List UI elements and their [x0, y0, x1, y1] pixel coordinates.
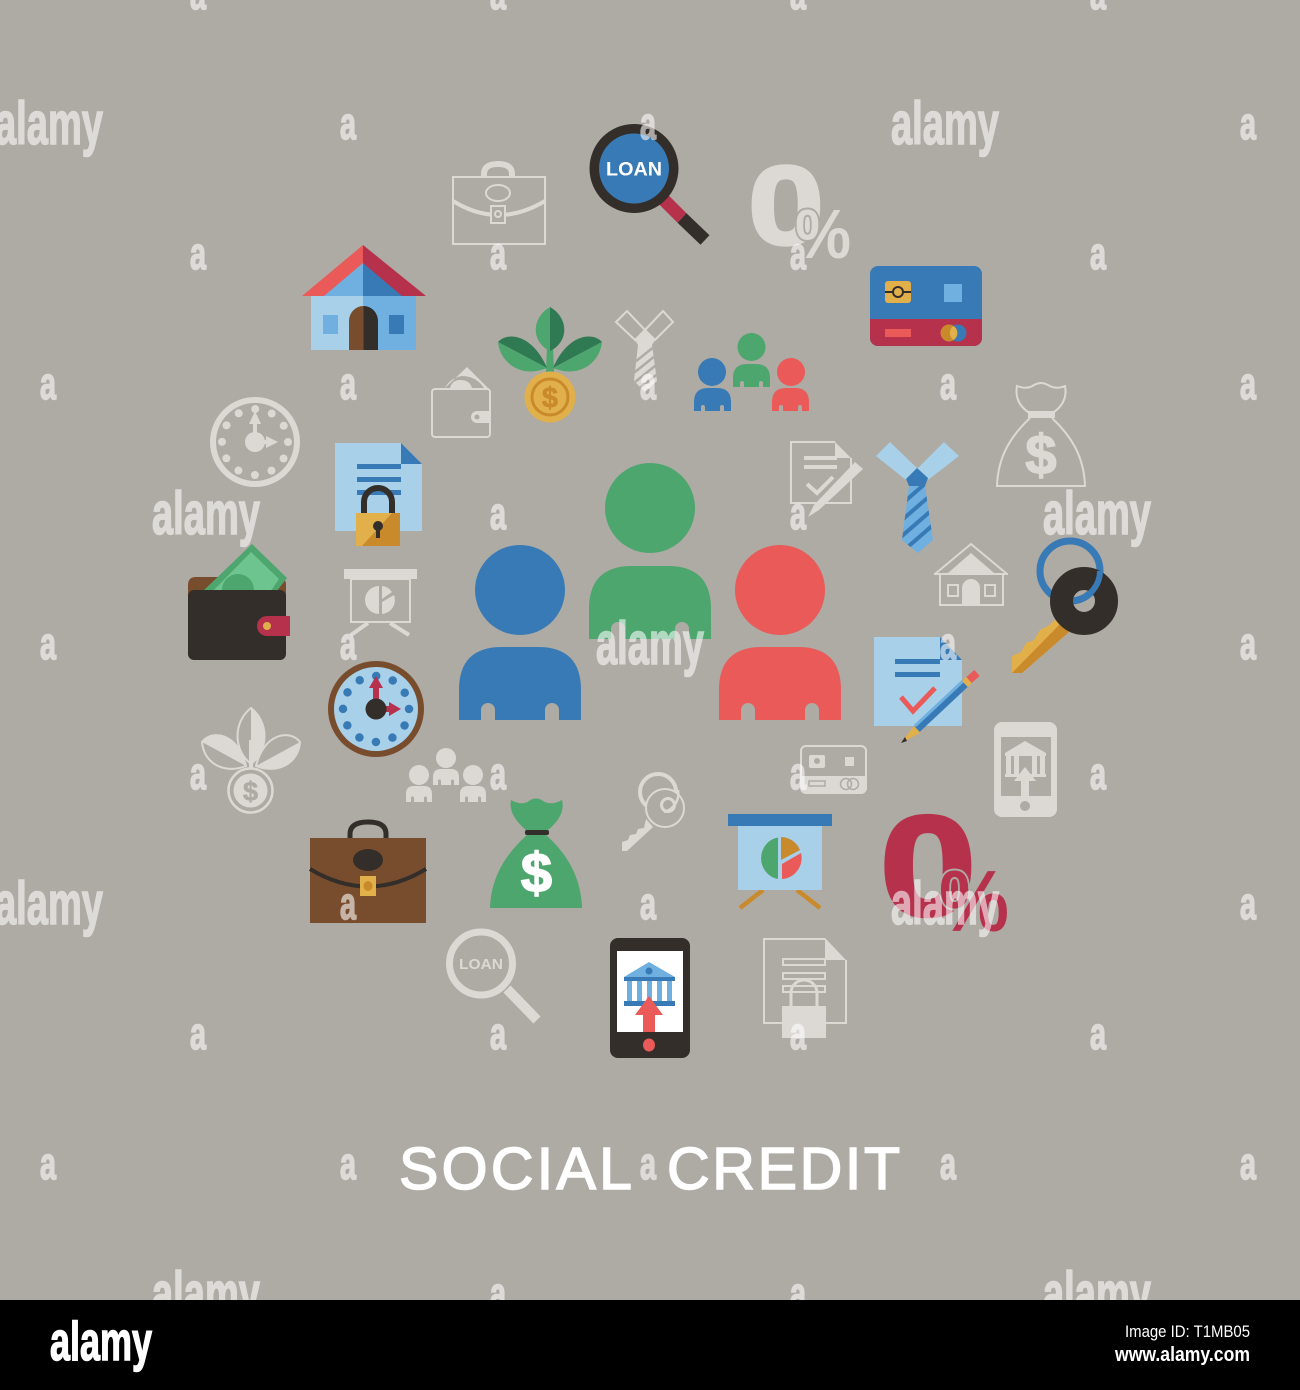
icon: key with ring: [1012, 541, 1106, 673]
watermark pattern: a: [1240, 358, 1257, 409]
watermark pattern: a: [940, 618, 957, 669]
watermark pattern: alamy: [891, 870, 999, 937]
title: SOCIAL: [399, 1136, 632, 1202]
watermark pattern: a: [40, 618, 57, 669]
watermark pattern: a: [1240, 878, 1257, 929]
icon: house: [302, 245, 426, 350]
watermark pattern: a: [940, 1138, 957, 1189]
icon: outline money bag: [997, 383, 1085, 486]
icon: plant with coin: $: [542, 382, 558, 414]
icon: outline presentation board: [344, 569, 417, 635]
central group: three people: [459, 463, 841, 720]
watermark pattern: a: [1090, 1008, 1107, 1059]
watermark pattern: a: [190, 1008, 207, 1059]
footer logo: alamy: [50, 1310, 152, 1372]
icon: crimson zero percent: %: [939, 854, 1009, 950]
icon: money bag: [490, 798, 582, 908]
watermark pattern: alamy: [1043, 1260, 1151, 1327]
icon: presentation board: [728, 814, 832, 908]
watermark pattern: a: [490, 1008, 507, 1059]
icon: outline tie: [616, 311, 673, 396]
watermark pattern: alamy: [152, 480, 260, 547]
icon: outline house: [934, 544, 1008, 605]
watermark pattern: a: [490, 748, 507, 799]
watermark pattern: a: [190, 228, 207, 279]
watermark pattern: a: [640, 98, 657, 149]
icon: loan magnifier: [590, 124, 705, 240]
icon: outline document with padlock: [764, 938, 846, 1038]
watermark pattern: a: [790, 488, 807, 539]
title: CREDIT: [667, 1136, 900, 1202]
icon: plant with coin: [498, 307, 602, 422]
person: small blue: [694, 358, 731, 411]
icon: outline zero percent: [748, 143, 851, 273]
icon: outline credit card: [800, 746, 867, 793]
watermark pattern: a: [1240, 1138, 1257, 1189]
person: red: [719, 545, 841, 720]
watermark pattern: alamy: [596, 610, 704, 677]
icon: document with padlock: [335, 443, 422, 546]
watermark pattern: a: [790, 1008, 807, 1059]
icon: phone with bank: [610, 938, 690, 1058]
footer bar: [0, 1300, 1300, 1390]
watermark pattern: a: [640, 1138, 657, 1189]
icon: outline zero percent: %: [795, 195, 851, 273]
watermark pattern: a: [1240, 98, 1257, 149]
watermark pattern: a: [190, 748, 207, 799]
icon: outline plant with coin: [202, 708, 300, 812]
icon: small team: [694, 333, 809, 411]
watermark pattern: a: [1090, 228, 1107, 279]
watermark pattern: a: [940, 358, 957, 409]
watermark pattern: a: [490, 228, 507, 279]
icon: briefcase: [310, 822, 426, 923]
icon: crimson zero percent: [880, 787, 1009, 950]
person: outline left: [406, 765, 432, 802]
icon: outline plant with coin: $: [243, 776, 258, 806]
watermark pattern: a: [40, 358, 57, 409]
icon: credit card: [870, 266, 982, 346]
watermark pattern: alamy: [0, 870, 103, 937]
watermark pattern: a: [490, 1268, 507, 1319]
watermark pattern: a: [340, 878, 357, 929]
watermark pattern: a: [640, 358, 657, 409]
watermark pattern: a: [790, 1268, 807, 1319]
icon: crimson zero percent: 0: [880, 787, 976, 946]
watermark pattern: alamy: [152, 1260, 260, 1327]
person: small red: [772, 358, 809, 411]
watermark pattern: a: [790, 228, 807, 279]
icon: loan magnifier: LOAN: [606, 160, 662, 180]
person: outline right: [460, 765, 486, 802]
icon: outline key: [622, 774, 684, 851]
watermark pattern: a: [490, 488, 507, 539]
icon: blue tie: [876, 442, 959, 558]
person: outline top: [433, 748, 459, 785]
icon: document with pencil: [874, 637, 977, 743]
watermark pattern: a: [790, 748, 807, 799]
icon: clock: [328, 661, 424, 757]
icon: outline zero percent: 0: [748, 143, 824, 268]
watermark pattern: a: [640, 878, 657, 929]
icon: outline small team: [406, 748, 486, 802]
watermark pattern: alamy: [1043, 480, 1151, 547]
icon: outline phone with bank: [994, 722, 1057, 817]
watermark pattern: a: [340, 618, 357, 669]
watermark pattern: alamy: [0, 90, 103, 157]
icon: outline document with check: [791, 442, 863, 517]
watermark pattern: a: [340, 98, 357, 149]
watermark pattern: a: [340, 1138, 357, 1189]
icon: wallet with cash: [188, 544, 290, 660]
watermark pattern: alamy: [891, 90, 999, 157]
person: green: [589, 463, 711, 639]
website: www.alamy.com: [1114, 1344, 1250, 1366]
watermark pattern: a: [1090, 748, 1107, 799]
watermark pattern: a: [1240, 618, 1257, 669]
image id: Image ID: T1MB05: [1125, 1322, 1250, 1341]
title: [399, 1136, 900, 1202]
icon: outline money bag: $: [1025, 423, 1057, 486]
icon: outline loan magnifier: LOAN: [459, 957, 503, 973]
icon: outline clock: [213, 400, 297, 484]
icon: outline wallet: [432, 367, 491, 437]
watermark pattern: a: [340, 358, 357, 409]
person: blue: [459, 545, 581, 720]
icon: money bag: $: [521, 841, 552, 904]
icon: outline loan magnifier: [450, 932, 537, 1020]
icon: outline briefcase: [453, 164, 545, 244]
person: small green: [733, 333, 770, 387]
watermark pattern: a: [40, 1138, 57, 1189]
